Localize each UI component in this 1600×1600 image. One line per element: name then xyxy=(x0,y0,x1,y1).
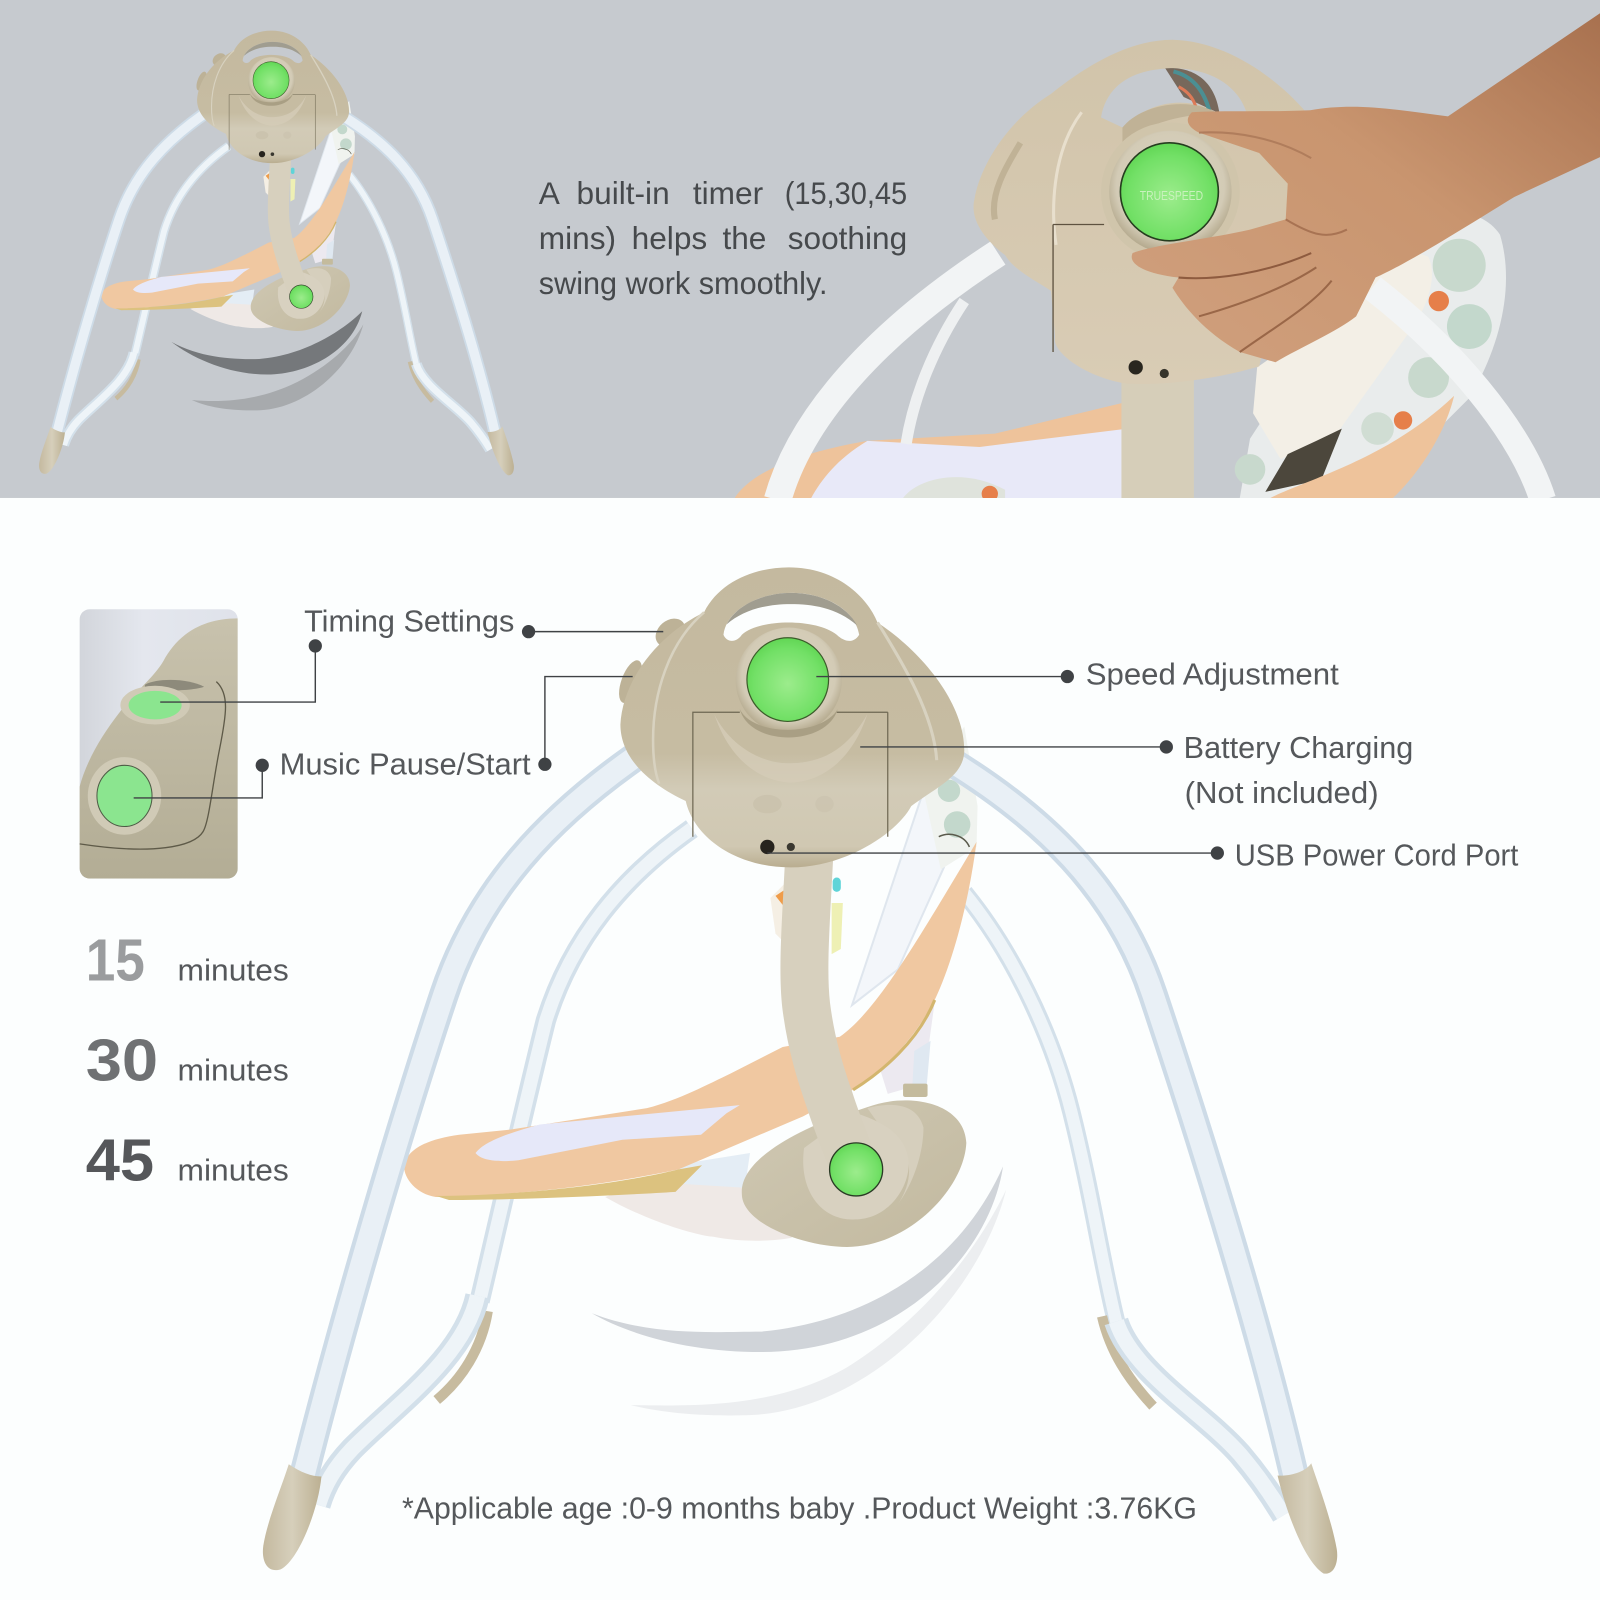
callout: usb power cord port: USB Power Cord Port xyxy=(1235,838,1519,872)
body copy: timer description: soothing xyxy=(788,220,907,256)
arm stem xyxy=(804,857,855,1168)
body copy: timer description: timer xyxy=(693,175,763,211)
body copy: timer description: helps xyxy=(632,220,707,256)
body copy: timer description: A xyxy=(539,175,561,211)
callout: music pause/start: Music Pause/Start xyxy=(280,747,531,781)
control head closeup xyxy=(974,40,1308,384)
body copy: timer description xyxy=(539,175,907,301)
callout: usb power cord port xyxy=(767,838,1519,872)
control head xyxy=(620,567,964,867)
right white tube xyxy=(1372,288,1543,500)
body copy: timer description: built-in xyxy=(577,175,670,211)
callout: battery charging: (Not included) xyxy=(1185,776,1379,810)
callout: speed adjustment: Speed Adjustment xyxy=(1086,658,1339,692)
timer option: 15 minutes: minutes xyxy=(178,954,289,988)
hanging toy xyxy=(770,878,843,954)
callout: battery charging: Battery Charging xyxy=(1184,731,1413,765)
callout: battery charging xyxy=(860,731,1413,810)
control head closeup: TRUESPEED xyxy=(1140,188,1203,203)
swing photo: front view with speed dial xyxy=(263,567,1337,1574)
timer option: 30 minutes: 30 xyxy=(86,1027,158,1094)
body copy: timer description: (15,30,45 xyxy=(785,175,907,211)
rear tube xyxy=(906,301,964,444)
lower hub dial xyxy=(830,1143,883,1196)
feet xyxy=(263,1463,1337,1574)
footnote: age and weight: *Applicable age :0-9 months baby .Product Weight :3.76KG xyxy=(402,1491,1197,1525)
small swing: overview in the banner xyxy=(39,31,514,475)
body copy: timer description: mins) xyxy=(539,220,616,256)
callout: timing settings (inset) xyxy=(160,605,663,702)
backrest fabric xyxy=(852,727,978,1097)
timer option: 15 minutes xyxy=(86,927,289,994)
timer option: 15 minutes: 15 xyxy=(86,927,145,994)
timer option: 45 minutes xyxy=(86,1127,289,1194)
motion arcs under large swing xyxy=(592,1166,1006,1415)
inset photo: timing and music buttons xyxy=(80,609,238,879)
left white tube xyxy=(778,253,998,500)
rear legs and rails xyxy=(318,829,1284,1515)
body copy: timer description: the xyxy=(722,220,766,256)
body copy: timer description: swing work smoothly. xyxy=(539,265,828,301)
closeup photo: hand turning dial xyxy=(735,13,1600,502)
callout: music pause/start xyxy=(134,677,633,798)
timer option: 30 minutes: minutes xyxy=(178,1054,289,1088)
panel: top grey banner xyxy=(0,0,1600,498)
seat fabric in closeup xyxy=(734,403,1122,498)
small swing motion arcs xyxy=(171,311,363,410)
lower motor hub body xyxy=(742,1100,966,1247)
timer option: 45 minutes: 45 xyxy=(86,1127,154,1194)
timer option: 30 minutes xyxy=(86,1027,289,1094)
timer option: 45 minutes: minutes xyxy=(178,1154,289,1188)
seat xyxy=(404,842,977,1241)
side buttons on head xyxy=(614,613,691,706)
callout: timing settings (inset): Timing Settings xyxy=(304,605,514,639)
stem xyxy=(1121,378,1194,500)
backrest with printed fabric xyxy=(1235,212,1506,498)
callout: speed adjustment xyxy=(816,658,1339,692)
front legs xyxy=(304,757,1294,1474)
hand xyxy=(1132,13,1600,362)
